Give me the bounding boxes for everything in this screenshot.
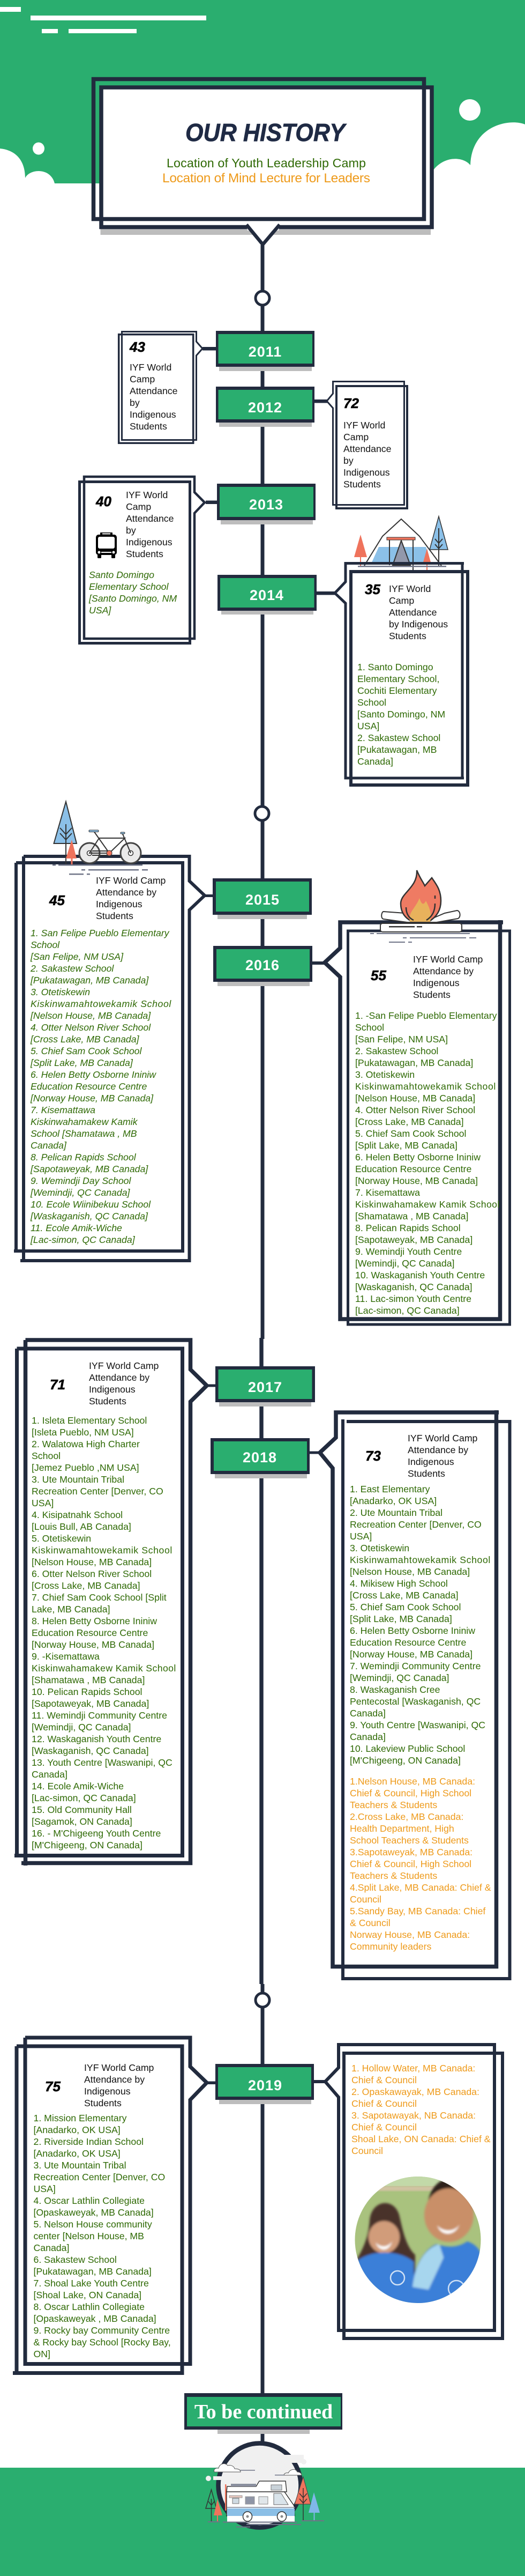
year 2013: 2013 [249, 497, 283, 513]
card 2017: 9. -Kisemattawa [32, 1651, 100, 1662]
card 2018: [Nelson House, MB Canada] [350, 1566, 470, 1577]
card 2018: 8. Waskaganish Cree [350, 1684, 440, 1695]
card 2014: USA] [357, 721, 379, 731]
card 2011: by [130, 397, 140, 408]
card 2017: School [32, 1450, 61, 1461]
card 2017: IYF World Camp [89, 1360, 159, 1371]
footer green band [0, 2468, 525, 2576]
card 2017: [Isleta Pueblo, NM USA] [32, 1427, 134, 1438]
card 2013: USA] [89, 605, 111, 616]
card 2018: 5.Sandy Bay, MB Canada: Chief [350, 1906, 485, 1916]
card 2019 left: 9. Rocky bay Community Centre [33, 2325, 170, 2336]
card 2018: 2. Ute Mountain Tribal [350, 1507, 442, 1518]
card 2017: [Lac-simon, QC Canada] [32, 1793, 136, 1803]
card 2016: 6. Helen Betty Osborne Ininiw [355, 1152, 481, 1163]
timeline node 3 [256, 1993, 269, 2007]
card 2016: [Sapotaweyak, MB Canada] [355, 1234, 472, 1245]
title panel [93, 79, 432, 245]
to be continued banner [184, 2393, 342, 2434]
icon: campfire [370, 870, 476, 943]
card 2018: 3. Otetiskewin [350, 1543, 409, 1553]
card 2014: by Indigenous [389, 619, 448, 630]
card 2018: 6. Helen Betty Osborne Ininiw [350, 1625, 475, 1636]
card 2018: IYF World Camp [408, 1433, 478, 1444]
card 2016: 1. -San Felipe Pueblo Elementary [355, 1010, 497, 1021]
card 2016: 5. Chief Sam Cook School [355, 1128, 466, 1139]
card 2014: [Santo Domingo, NM [357, 709, 445, 720]
card 2012: IYF World [343, 420, 385, 431]
card 2016: 8. Pelican Rapids School [355, 1223, 461, 1233]
card 2015: 3. Otetiskewin [31, 987, 90, 997]
card 2019 left: 75 [45, 2078, 61, 2094]
card 2019 right: 1. Hollow Water, MB Canada: [351, 2063, 475, 2074]
card 2017: [Nelson House, MB Canada] [32, 1557, 152, 1567]
card 2018: [Split Lake, MB Canada] [350, 1613, 452, 1624]
card 2015: [Waskaganish, QC Canada] [30, 1211, 148, 1222]
card 2019 left: 3. Ute Mountain Tribal [33, 2160, 126, 2171]
clouds [206, 2455, 306, 2481]
card 2017: 2. Walatowa High Charter [32, 1439, 140, 1449]
card 2016: [Waskaganish, QC Canada] [355, 1282, 472, 1292]
icon: bicycle and trees [52, 802, 148, 875]
card 2019 left: [Anadarko, OK USA] [33, 2125, 121, 2135]
card 2014: 35 [365, 581, 380, 597]
card 2016: 10. Waskaganish Youth Centre [355, 1270, 485, 1280]
year 2017 [215, 1366, 315, 1407]
card 2017: 1. Isleta Elementary School [32, 1415, 147, 1426]
card 2015: [Lac-simon, QC Canada] [30, 1234, 136, 1245]
card 2018: Norway House, MB Canada: [350, 1929, 470, 1940]
card 2013: Elementary School [89, 581, 169, 592]
card 2015: 11. Ecole Amik-Wiche [31, 1223, 122, 1233]
card 2016: Kiskinwamahtowekamik School [355, 1081, 496, 1092]
card 2017: 10. Pelican Rapids School [32, 1686, 142, 1697]
card 2011: Indigenous [130, 409, 176, 420]
card 2018: Chief & Council, High School [350, 1859, 471, 1869]
card 2016: Indigenous [413, 978, 460, 988]
card 2017: 5. Otetiskewin [32, 1533, 91, 1544]
card 2019 left: 4. Oscar Lathlin Collegiate [33, 2195, 145, 2206]
card 2019 right [314, 2043, 502, 2338]
header: green sky with clouds [0, 0, 525, 183]
card 2019 left: Canada] [33, 2242, 69, 2253]
card 2018: 4.Split Lake, MB Canada: Chief & [350, 1882, 491, 1893]
card 2015: Attendance by [96, 887, 156, 898]
card 2018: [M'Chigeeng, ON Canada] [350, 1755, 461, 1766]
card 2019 right: 2. Opaskawayak, MB Canada: [351, 2086, 479, 2097]
card 2011: 43 [129, 339, 145, 355]
card 2018: 10. Lakeview Public School [350, 1743, 465, 1754]
card 2017: 12. Waskaganish Youth Centre [32, 1734, 161, 1744]
icon: bus [96, 532, 117, 558]
card 2018: Council [350, 1894, 381, 1905]
card 2017: 71 [50, 1376, 65, 1393]
photo: two smiling girls [354, 2174, 482, 2306]
card 2017: Lake, MB Canada] [32, 1604, 110, 1615]
card 2017: [Shamatawa , MB Canada] [32, 1675, 145, 1685]
card 2017: 15. Old Community Hall [32, 1804, 132, 1815]
card 2019 left: & Rocky bay School [Rocky Bay, [33, 2337, 171, 2348]
card 2018: Education Resource Centre [350, 1637, 466, 1648]
card 2015: IYF World Camp [96, 875, 166, 886]
year 2011 [216, 331, 314, 371]
to be continued banner: To be continued [194, 2401, 333, 2423]
card 2018: Students [408, 1468, 445, 1479]
year 2012: 2012 [248, 399, 282, 416]
card 2019 left: 7. Shoal Lake Youth Centre [33, 2278, 149, 2289]
card 2018: Community leaders [350, 1941, 432, 1952]
card 2019 left: 6. Sakastew School [33, 2254, 117, 2265]
card 2019 left: 5. Nelson House community [33, 2219, 152, 2230]
card 2018: 7. Wemindji Community Centre [350, 1661, 481, 1671]
card 2016: [Split Lake, MB Canada] [355, 1140, 458, 1151]
card 2018: Indigenous [408, 1456, 454, 1467]
timeline node 1 [256, 291, 269, 305]
card 2012: by [343, 455, 354, 466]
card 2018: Pentecostal [Waskaganish, QC [350, 1696, 481, 1707]
card 2014: [Pukatawagan, MB [357, 744, 437, 755]
year 2012 [216, 387, 314, 427]
year 2013 [217, 484, 316, 524]
card 2013: 40 [95, 493, 111, 509]
card 2015: [San Felipe, NM USA] [30, 951, 124, 962]
card 2011: Camp [130, 374, 155, 384]
card 2018: 2.Cross Lake, MB Canada: [350, 1811, 463, 1822]
card 2014: Elementary School, [357, 673, 439, 684]
card 2014: 1. Santo Domingo [357, 662, 433, 672]
card 2018: Teachers & Students [350, 1870, 437, 1881]
card 2019 left: Indigenous [84, 2086, 131, 2097]
card 2015 [14, 856, 213, 1262]
card 2018: & Council [350, 1918, 391, 1928]
card 2011 [119, 331, 216, 443]
card 2015: Indigenous [96, 899, 142, 909]
card 2017: [M'Chigeeng, ON Canada] [32, 1840, 142, 1850]
card 2017: USA] [32, 1498, 54, 1508]
card 2014: Students [389, 631, 426, 641]
card 2019 right: Shoal Lake, ON Canada: Chief & [351, 2134, 491, 2144]
card 2018: Teachers & Students [350, 1800, 437, 1810]
card 2019 left: 1. Mission Elementary [33, 2113, 127, 2123]
card 2013 [79, 477, 218, 643]
card 2018: School Teachers & Students [350, 1835, 469, 1846]
timeline node 2 [255, 806, 269, 820]
card 2016: 3. Otetiskewin [355, 1069, 415, 1080]
card 2019 left: [Opaskaweyak, MB Canada] [33, 2207, 154, 2218]
card 2017: 14. Ecole Amik-Wiche [32, 1781, 124, 1792]
card 2018: 3.Sapotaweyak, MB Canada: [350, 1847, 472, 1857]
card 2016: Attendance by [413, 966, 474, 976]
card 2018: 4. Mikisew High School [350, 1578, 448, 1589]
card 2017: [Norway House, MB Canada] [32, 1639, 154, 1650]
card 2012 [314, 382, 407, 508]
card 2016: 2. Sakastew School [355, 1046, 438, 1056]
card 2011: Attendance [130, 386, 178, 396]
card 2015: 10. Ecole Wiinibekuu School [31, 1199, 151, 1210]
card 2017: [Wemindji, QC Canada] [32, 1722, 131, 1733]
card 2014: IYF World [389, 583, 431, 594]
card 2013: Camp [126, 501, 151, 512]
card 2015: [Sapotaweyak, MB Canada] [30, 1164, 148, 1174]
card 2016: Students [413, 989, 451, 1000]
card 2015: Education Resource Centre [31, 1081, 147, 1092]
card 2015: 45 [49, 892, 65, 908]
card 2017: [Cross Lake, MB Canada] [32, 1580, 140, 1591]
year 2011: 2011 [249, 344, 282, 360]
legend: mind lecture: Location of Mind Lecture for Leaders [162, 171, 370, 186]
year 2017: 2017 [248, 1379, 282, 1395]
card 2018: Kiskinwamahtowekamik School [350, 1555, 491, 1565]
card 2018: USA] [350, 1531, 372, 1542]
year 2019: 2019 [248, 2077, 282, 2093]
year 2015 [213, 878, 312, 919]
card 2015: 8. Pelican Rapids School [31, 1152, 137, 1163]
card 2016: [Nelson House, MB Canada] [355, 1093, 475, 1104]
card 2015: [Split Lake, MB Canada] [30, 1057, 133, 1068]
card 2013: Indigenous [126, 537, 172, 547]
year 2014: 2014 [250, 587, 284, 603]
year 2016 [213, 946, 312, 986]
card 2018: 9. Youth Centre [Waswanipi, QC [350, 1720, 485, 1730]
card 2011: IYF World [130, 362, 171, 373]
year 2019 [215, 2064, 314, 2104]
card 2014: Canada] [357, 756, 393, 767]
card 2017: 7. Chief Sam Cook School [Split [32, 1592, 167, 1603]
card 2017: 13. Youth Centre [Waswanipi, QC [32, 1757, 172, 1768]
card 2016: [Wemindji, QC Canada] [355, 1258, 454, 1269]
heading: OUR HISTORY [185, 119, 347, 146]
card 2012: Camp [343, 432, 369, 442]
card 2015: [Nelson House, MB Canada] [30, 1010, 151, 1021]
card 2016: Education Resource Centre [355, 1164, 471, 1174]
card 2018: [Anadarko, OK USA] [350, 1496, 437, 1506]
card 2017: 3. Ute Mountain Tribal [32, 1474, 124, 1485]
card 2019 left: [Anadarko, OK USA] [33, 2148, 121, 2159]
card 2014: School [357, 697, 386, 708]
card 2014: Camp [389, 595, 414, 606]
card 2019 right: 3. Sapotawayak, NB Canada: [351, 2110, 476, 2121]
card 2015: Canada] [31, 1140, 67, 1151]
card 2014 [317, 563, 468, 785]
card 2018: 5. Chief Sam Cook School [350, 1602, 461, 1612]
card 2017 [14, 1340, 216, 1866]
card 2017: 16. - M'Chigeeng Youth Centre [32, 1828, 161, 1839]
card 2018: Recreation Center [Denver, CO [350, 1519, 482, 1530]
card 2017: [Louis Bull, AB Canada] [32, 1521, 131, 1532]
card 2015: Kiskinwahamakew Kamik [31, 1116, 138, 1127]
card 2017: [Jemez Pueblo ,NM USA] [32, 1462, 139, 1473]
card 2017: Canada] [32, 1769, 68, 1780]
card 2019 left: center [Nelson House, MB [33, 2231, 144, 2241]
card 2014: Attendance [389, 607, 437, 618]
card 2017: 11. Wemindji Community Centre [32, 1710, 167, 1721]
card 2015: 9. Wemindji Day School [31, 1175, 132, 1186]
footer badge: camper van scene [206, 2443, 324, 2528]
card 2017: [Waskaganish, QC Canada] [32, 1745, 149, 1756]
card 2017: Kiskinwamahtowekamik School [32, 1545, 172, 1556]
card 2016 [312, 920, 510, 1324]
timeline spine [259, 245, 265, 2441]
card 2015: 6. Helen Betty Osborne Ininiw [31, 1069, 156, 1080]
card 2015: [Cross Lake, MB Canada] [30, 1034, 140, 1045]
card 2017: Education Resource Centre [32, 1627, 148, 1638]
card 2016: [Norway House, MB Canada] [355, 1175, 478, 1186]
card 2013: [Santo Domingo, NM [88, 593, 177, 604]
card 2011: Students [130, 421, 167, 432]
card 2016: [Lac-simon, QC Canada] [355, 1305, 460, 1316]
card 2012: Indigenous [343, 467, 390, 478]
card 2012: Students [343, 479, 381, 490]
card 2016: Kiskinwahamakew Kamik School [355, 1199, 500, 1210]
card 2017: 8. Helen Betty Osborne Ininiw [32, 1616, 157, 1626]
card 2018: 73 [365, 1448, 381, 1464]
card 2019 right: Chief & Council [351, 2122, 417, 2133]
card 2015: School [31, 939, 60, 950]
icon: tent with trees [354, 516, 448, 573]
card 2016: [Pukatawagan, MB Canada] [355, 1057, 473, 1068]
card 2018: Health Department, High [350, 1823, 454, 1834]
card 2013: by [126, 525, 136, 536]
card 2019 left [13, 2038, 216, 2373]
card 2019 left: USA] [33, 2183, 56, 2194]
card 2016: 4. Otter Nelson River School [355, 1105, 475, 1115]
card 2018: Canada] [350, 1708, 386, 1719]
card 2018: Chief & Council, High School [350, 1788, 471, 1798]
card 2013: IYF World [126, 490, 168, 500]
card 2018: Attendance by [408, 1445, 468, 1455]
card 2015: 5. Chief Sam Cook School [31, 1046, 142, 1056]
card 2015: [Wemindji, QC Canada] [30, 1187, 131, 1198]
card 2016: 7. Kisemattawa [355, 1187, 420, 1198]
card 2017: Students [89, 1396, 126, 1407]
year 2015: 2015 [245, 892, 280, 908]
card 2018: 1. East Elementary [350, 1484, 430, 1494]
card 2015: [Pukatawagan, MB Canada] [30, 975, 149, 986]
card 2015: Kiskinwamahtowekamik School [31, 998, 171, 1009]
card 2016: [Cross Lake, MB Canada] [355, 1116, 464, 1127]
card 2018: [Wemindji, QC Canada] [350, 1672, 449, 1683]
card 2013: Students [126, 549, 163, 559]
card 2019 right: Chief & Council [351, 2075, 417, 2085]
card 2019 left: IYF World Camp [84, 2062, 154, 2073]
card 2019 right: Chief & Council [351, 2098, 417, 2109]
card 2019 left: [Opaskaweyak , MB Canada] [33, 2313, 156, 2324]
trees [206, 2477, 324, 2522]
card 2015: [Norway House, MB Canada] [30, 1093, 154, 1104]
year 2018 [211, 1438, 310, 1478]
card 2016: [San Felipe, NM USA] [355, 1034, 448, 1045]
card 2016: 9. Wemindji Youth Centre [355, 1246, 462, 1257]
year 2014 [218, 575, 317, 615]
card 2014: Cochiti Elementary [357, 685, 437, 696]
card 2015: School [Shamatawa , MB [31, 1128, 137, 1139]
card 2019 left: 8. Oscar Lathlin Collegiate [33, 2301, 145, 2312]
card 2016: [Shamatawa , MB Canada] [355, 1211, 468, 1222]
card 2018: Canada] [350, 1731, 386, 1742]
card 2015: 2. Sakastew School [30, 963, 114, 974]
card 2016: 11. Lac-simon Youth Centre [355, 1293, 471, 1304]
legend: youth leadership camp: Location of Youth Leadership Camp [167, 156, 366, 170]
card 2017: Recreation Center [Denver, CO [32, 1486, 163, 1497]
card 2012: 72 [343, 395, 359, 411]
card 2017: 4. Kisipatnahk School [32, 1509, 123, 1520]
year 2016: 2016 [245, 957, 280, 973]
card 2016: School [355, 1022, 384, 1033]
card 2019 right: Council [351, 2145, 383, 2156]
card 2017: [Sagamok, ON Canada] [32, 1816, 132, 1827]
card 2019 left: Recreation Center [Denver, CO [33, 2172, 165, 2182]
card 2018: [Cross Lake, MB Canada] [350, 1590, 459, 1601]
card 2013: Santo Domingo [89, 569, 154, 580]
card 2017: [Sapotaweyak, MB Canada] [32, 1698, 149, 1709]
card 2017: 6. Otter Nelson River School [32, 1568, 152, 1579]
card 2013: Attendance [126, 513, 174, 524]
card 2012: Attendance [343, 443, 392, 454]
card 2014: 2. Sakastew School [357, 732, 440, 743]
card 2015: 1. San Felipe Pueblo Elementary [31, 928, 170, 938]
card 2017: Attendance by [89, 1372, 149, 1383]
card 2019 left: Students [84, 2098, 122, 2108]
card 2016: IYF World Camp [413, 954, 483, 965]
card 2015: 7. Kisemattawa [31, 1105, 95, 1115]
card 2018 [310, 1410, 510, 1979]
card 2016: 55 [371, 967, 386, 983]
van [225, 2481, 295, 2522]
card 2019 left: ON] [33, 2349, 50, 2359]
card 2017: Indigenous [89, 1384, 136, 1395]
card 2019 left: Attendance by [84, 2074, 145, 2085]
card 2019 left: [Shoal Lake, ON Canada] [33, 2290, 141, 2300]
card 2019 left: [Pukatawagan, MB Canada] [33, 2266, 152, 2277]
card 2015: 4. Otter Nelson River School [31, 1022, 151, 1033]
card 2018: 1.Nelson House, MB Canada: [350, 1776, 475, 1787]
card 2017: Kiskinwahamakew Kamik School [32, 1663, 176, 1674]
card 2019 left: 2. Riverside Indian School [33, 2136, 144, 2147]
card 2015: Students [96, 911, 133, 921]
year 2018: 2018 [243, 1449, 277, 1465]
card 2018: [Norway House, MB Canada] [350, 1649, 472, 1660]
